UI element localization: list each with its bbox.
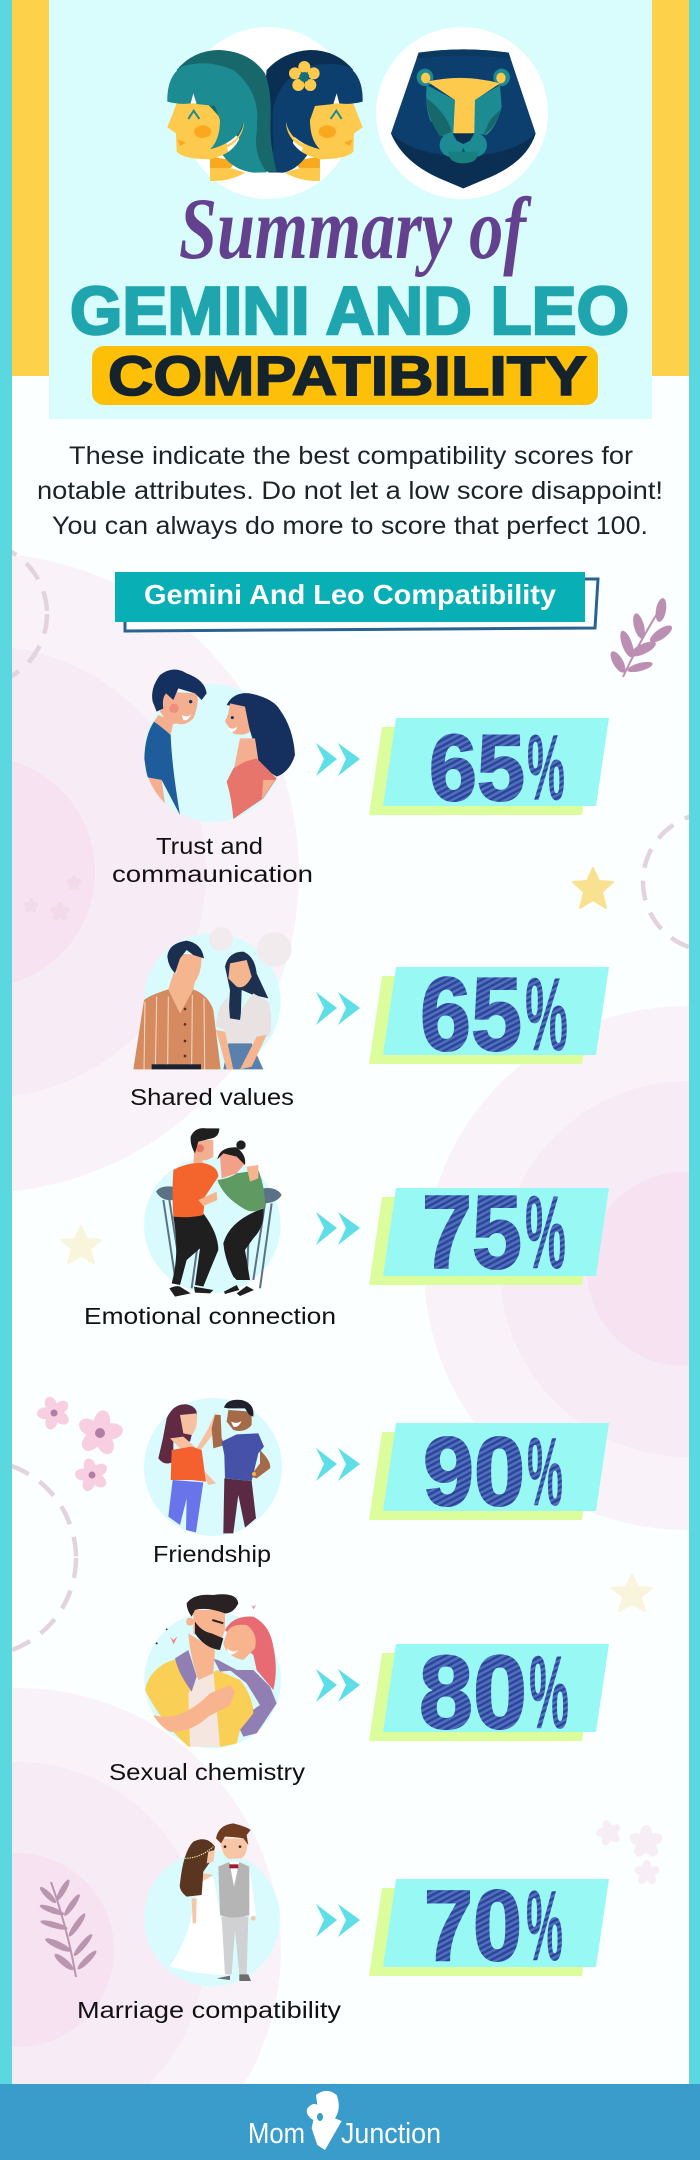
score: friendship [369, 1417, 609, 1526]
score: sexual chemistry: 80 [419, 1635, 527, 1751]
arrow [316, 1448, 337, 1481]
title: gemini and leo: GEMINI AND LEO [70, 273, 629, 349]
arrow [338, 1212, 360, 1245]
label: emotional connection: Emotional connection [84, 1303, 336, 1329]
title: summary of: Summary of [179, 181, 532, 278]
score: emotional connection: 75 [422, 1175, 522, 1291]
score: marriage compatibility: % [526, 1870, 563, 1982]
score: friendship: 90 [423, 1417, 525, 1526]
icon: gemini twins [167, 50, 363, 181]
label: trust and communication: commaunication [112, 861, 313, 887]
decoration: star [573, 868, 613, 908]
score: emotional connection: % [525, 1175, 566, 1291]
momjunction logo [248, 2091, 441, 2150]
decoration: fern leaf [38, 1878, 98, 1977]
label: marriage compatibility: Marriage compatibility [77, 1997, 342, 2023]
illustration: trust and communication couple [144, 670, 295, 822]
decoration: faint flowers left [23, 875, 82, 922]
arrow [338, 992, 360, 1025]
decoration: pink flowers [31, 1391, 128, 1496]
arrow [316, 743, 337, 776]
score: trust and communication: 65 [429, 715, 525, 820]
header panel [12, 0, 689, 419]
section banner: Gemini And Leo Compatibility [144, 579, 556, 610]
label: shared values: Shared values [130, 1084, 294, 1110]
arrow [338, 743, 360, 776]
score: sexual chemistry [369, 1635, 609, 1751]
arrow [316, 1669, 337, 1702]
illustration: sexual chemistry couple [144, 1594, 281, 1748]
score: emotional connection [369, 1175, 609, 1291]
illustration: shared values couple [133, 927, 292, 1070]
score: sexual chemistry: % [529, 1635, 569, 1751]
score: trust and communication [369, 715, 609, 820]
arrow [316, 1904, 337, 1937]
section banner [115, 572, 598, 631]
arrow [338, 1669, 360, 1702]
intro text: notable attributes. Do not let a low score disappoint! [37, 477, 663, 505]
momjunction logo: Junction [341, 2118, 441, 2150]
intro text: You can always do more to score that perfect 100. [52, 512, 648, 540]
score: shared values [369, 957, 609, 1073]
score: marriage compatibility: 70 [424, 1870, 522, 1982]
illustration: marriage compatibility couple [144, 1823, 280, 1986]
label: trust and communication [112, 833, 313, 887]
arrow [316, 1212, 337, 1245]
score: friendship: % [527, 1417, 563, 1526]
dashed arcs [0, 542, 700, 1656]
decoration: star [61, 1226, 101, 1263]
title: compatibility pill: COMPATIBILITY [108, 344, 587, 407]
illustration: friendship couple [144, 1398, 282, 1536]
background circles [0, 553, 700, 2160]
intro text [37, 442, 663, 540]
score: marriage compatibility [369, 1870, 609, 1982]
label: friendship: Friendship [153, 1541, 271, 1567]
score: shared values: % [525, 957, 568, 1073]
footer band [0, 2084, 700, 2160]
arrow [338, 1904, 360, 1937]
decoration: star [612, 1575, 652, 1611]
icon: leo lion [391, 49, 536, 188]
label: trust and communication: Trust and [156, 833, 263, 859]
momjunction logo: Mom [248, 2118, 305, 2150]
intro text: These indicate the best compatibility scores for [69, 442, 633, 470]
score: trust and communication: % [527, 715, 565, 820]
arrow [316, 992, 337, 1025]
decoration: faint flowers right [592, 1817, 664, 1886]
illustration: emotional connection couple [144, 1128, 282, 1297]
score: shared values: 65 [420, 957, 522, 1073]
arrow [338, 1448, 360, 1481]
label: sexual chemistry: Sexual chemistry [109, 1759, 306, 1785]
decoration: leaf sprig [608, 597, 675, 677]
